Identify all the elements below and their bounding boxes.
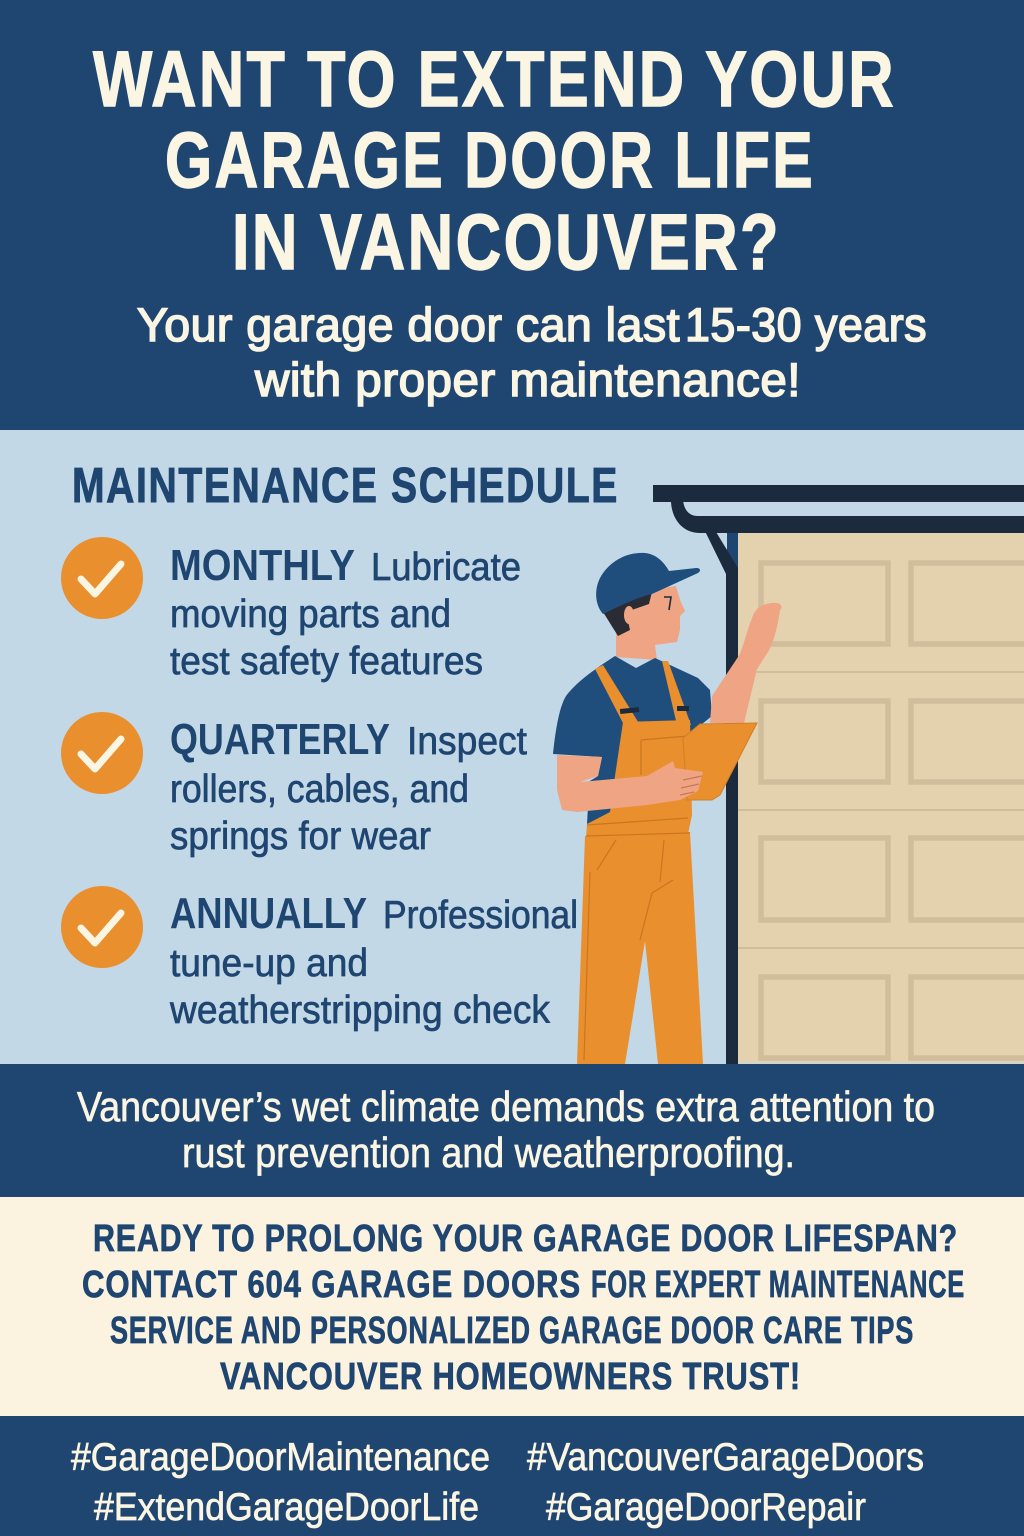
text: annually: weatherstripping check: [169, 989, 550, 1032]
overalls details: [584, 736, 690, 1060]
text: hashtags: #GarageDoorMaintenance: [71, 1436, 490, 1479]
schedule item: annually: [61, 886, 578, 1032]
panel: header band: [0, 0, 1024, 430]
worker ear: [624, 606, 634, 624]
worker neck and face: [616, 586, 685, 660]
text: climate note: rust prevention and weatherproofing.: [182, 1129, 795, 1176]
illustration: worker: [553, 553, 782, 1064]
worker eye: [664, 597, 671, 610]
panel: maintenance schedule background: [0, 430, 1024, 1064]
icon: annually check: [61, 886, 143, 968]
text: annually: [169, 889, 578, 1032]
worker shirt: [553, 656, 712, 790]
text: quarterly: springs for wear: [170, 815, 431, 858]
text: monthly: test safety features: [170, 640, 483, 683]
text: quarterly: rollers, cables, and: [170, 768, 469, 811]
title: [93, 34, 896, 286]
schedule item: monthly: [61, 537, 521, 683]
icon: quarterly check: [61, 712, 143, 794]
door panels: [761, 563, 1024, 1058]
text: hashtags: #ExtendGarageDoorLife: [94, 1486, 479, 1529]
panel: hashtag band: [0, 1416, 1024, 1536]
text: call to action: CONTACT 604 GARAGE DOORS: [82, 1264, 581, 1306]
subtitle: Your garage door can last: [137, 298, 680, 351]
clipboard: [683, 723, 757, 800]
text: hashtags: #GarageDoorRepair: [546, 1486, 866, 1529]
text: monthly: [170, 541, 521, 683]
text: hashtags: #VancouverGarageDoors: [527, 1436, 924, 1479]
subtitle: [137, 298, 927, 406]
text: monthly: MONTHLY: [170, 541, 355, 590]
text: quarterly: [170, 715, 527, 858]
text: quarterly: Inspect: [407, 720, 527, 763]
text: call to action: VANCOUVER HOMEOWNERS TRUST!: [220, 1356, 801, 1398]
text: call to action: [82, 1218, 965, 1398]
text: monthly: Lubricate: [371, 546, 521, 589]
text: monthly: moving parts and: [170, 593, 451, 636]
title: IN VANCOUVER?: [232, 197, 781, 286]
text: climate note: Vancouver’s wet climate demands extra attention to: [77, 1083, 935, 1130]
subtitle: with proper maintenance!: [254, 353, 801, 406]
door frame: [653, 485, 1024, 1064]
text: annually: tune-up and: [170, 942, 368, 985]
text: climate note: [77, 1083, 935, 1176]
text: quarterly: QUARTERLY: [170, 715, 390, 764]
worker cap: [596, 553, 700, 614]
worker overalls: [577, 661, 703, 1064]
panel: call to action background: [0, 1197, 1024, 1416]
worker hair: [603, 592, 652, 636]
heading: maintenance schedule: MAINTENANCE SCHEDULE: [72, 459, 619, 513]
text: hashtags: [71, 1436, 924, 1529]
title: GARAGE DOOR LIFE: [165, 115, 815, 204]
text: annually: ANNUALLY: [170, 889, 367, 938]
worker raised arm: [710, 603, 782, 723]
illustration: garage door: [653, 485, 1024, 1064]
icon: monthly check: [61, 537, 143, 619]
schedule item: quarterly: [61, 712, 527, 858]
subtitle: 15-30 years: [685, 298, 927, 351]
worker lower arm and hand: [557, 755, 703, 812]
door slab: [738, 533, 1024, 1063]
text: annually: Professional: [383, 894, 578, 937]
panel: climate band: [0, 1064, 1024, 1197]
